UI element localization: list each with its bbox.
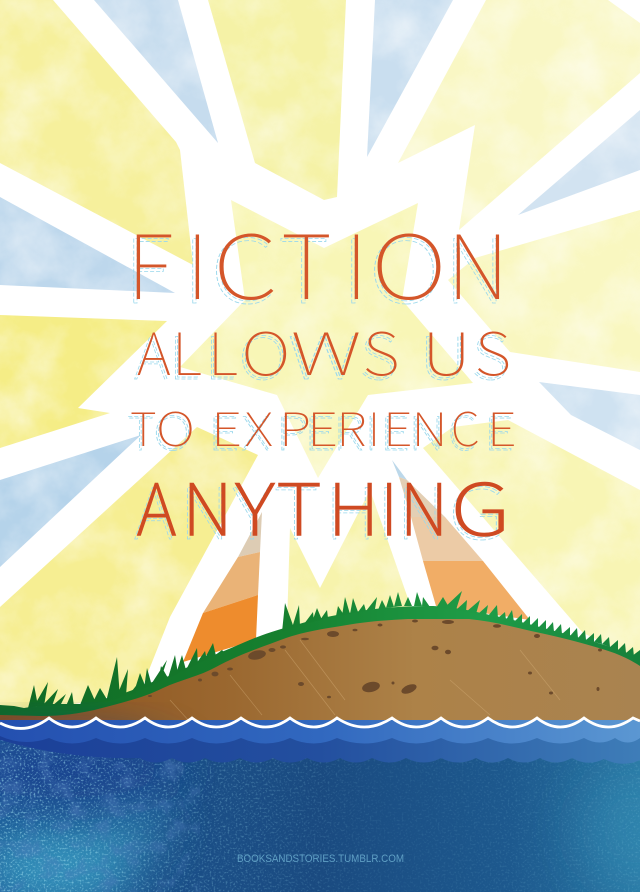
shadow line: to experience: T <box>127 397 154 464</box>
line: allows us: U <box>422 307 471 392</box>
line: anything: N <box>400 454 448 556</box>
deep water <box>0 725 640 892</box>
ray: central yellow star <box>180 200 473 478</box>
dirt mound <box>0 617 640 735</box>
ray: left blue upper <box>0 197 175 293</box>
line: fiction: I <box>186 196 209 325</box>
shadow line: allows us: L <box>205 311 235 396</box>
line: fiction: C <box>213 196 278 325</box>
shadow line: anything: T <box>274 458 318 560</box>
shadow line: anything: I <box>377 458 395 560</box>
shadow line: fiction: I <box>342 200 365 329</box>
line: to experience: O <box>156 393 195 460</box>
shadow line: to experience: R <box>333 397 363 464</box>
ray: left yellow upper <box>0 315 167 448</box>
shadow line: allows us: L <box>169 311 199 396</box>
dirt stones <box>148 620 602 698</box>
line: to experience: I <box>368 393 380 460</box>
shadow line: fiction: C <box>210 200 275 329</box>
shadow line: fiction: T <box>278 200 329 329</box>
shadow line: to experience: C <box>448 397 477 464</box>
shadow line: allows us: U <box>419 311 468 396</box>
shadow line: anything: G <box>448 458 507 560</box>
line: to experience: C <box>451 393 480 460</box>
shadow line: to experience: O <box>153 397 192 464</box>
line: allows us: S <box>363 307 400 392</box>
ray: top blue right <box>367 0 453 157</box>
shadow line: fiction: F <box>124 200 170 329</box>
island <box>0 591 640 735</box>
right orange ray <box>392 460 530 620</box>
shadow line: to experience: X <box>242 397 270 464</box>
headline <box>127 196 516 556</box>
line: to experience: E <box>487 393 516 460</box>
line: fiction: F <box>127 196 173 325</box>
line: allows us: S <box>475 307 511 392</box>
shadow line: fiction: I <box>183 200 206 329</box>
line: anything: A <box>137 454 176 556</box>
line: fiction: T <box>281 196 332 325</box>
shadow line: anything: N <box>180 458 230 560</box>
ray: left blue lower <box>0 435 141 567</box>
shadow line: anything: A <box>134 458 173 560</box>
deep water light blotches <box>0 770 640 892</box>
line: to experience: E <box>307 393 338 460</box>
deep water dark mottling <box>0 740 200 892</box>
ray: left yellow lower <box>0 427 258 720</box>
wave band: upper <box>0 720 640 744</box>
line: to experience: E <box>383 393 412 460</box>
credit url: BOOKSANDSTORIES.TUMBLR.COM <box>237 853 404 865</box>
ray: right pale yellow <box>448 210 640 372</box>
line: anything: G <box>451 454 510 556</box>
shadow line: fiction: O <box>368 200 444 329</box>
dirt scratches <box>170 640 560 722</box>
ray: top left yellow <box>0 0 193 265</box>
line: allows us: W <box>291 307 362 392</box>
ray: lower right pale yellow <box>423 420 640 660</box>
line: to experience: R <box>336 393 366 460</box>
deep water left shadow <box>0 738 180 798</box>
shadow line: to experience: I <box>365 397 377 464</box>
line: allows us: O <box>241 307 290 392</box>
line: to experience: T <box>130 393 157 460</box>
line: anything: N <box>182 454 232 556</box>
shadow line: allows us: S <box>472 311 508 396</box>
line: fiction: O <box>371 196 447 325</box>
line: anything: I <box>380 454 398 556</box>
ray: top blue left <box>94 0 218 143</box>
ray: top right pale yellow <box>398 0 640 230</box>
sea <box>0 718 640 892</box>
shadow line: to experience: E <box>208 397 239 464</box>
ray: top centre yellow <box>208 0 346 200</box>
line: allows us: A <box>137 307 171 392</box>
shadow line: to experience: E <box>380 397 410 464</box>
wave band: middle <box>0 725 640 764</box>
left orange ray <box>183 512 262 662</box>
shadow line: to experience: N <box>408 397 444 464</box>
line: anything: H <box>328 454 379 556</box>
line: fiction: I <box>345 196 368 325</box>
headline dashed shadow <box>124 200 514 560</box>
line: allows us: L <box>172 307 202 392</box>
line: anything: Y <box>236 454 274 556</box>
line: to experience: X <box>244 393 273 460</box>
shadow line: anything: N <box>397 458 445 560</box>
shadow line: allows us: A <box>134 311 168 396</box>
line: allows us: L <box>208 307 238 392</box>
shadow line: allows us: S <box>360 311 397 396</box>
shadow line: to experience: E <box>484 397 514 464</box>
line: anything: T <box>276 454 322 556</box>
line: to experience: P <box>279 393 311 460</box>
deep water grunge <box>0 725 640 892</box>
line: to experience: E <box>211 393 242 460</box>
ray: right blue lower <box>539 382 640 450</box>
shadow line: to experience: P <box>276 397 308 464</box>
ray: yellow under the M <box>287 490 412 625</box>
grass band <box>0 606 640 716</box>
grass blades <box>28 591 640 708</box>
ray: right blue upper <box>518 110 640 215</box>
shadow line: fiction: N <box>444 200 506 329</box>
white waterline <box>0 718 640 728</box>
shadow line: anything: Y <box>232 458 272 560</box>
shadow line: allows us: O <box>238 311 287 396</box>
shadow line: to experience: E <box>304 397 335 464</box>
line: to experience: N <box>412 393 448 460</box>
shadow line: allows us: W <box>288 311 359 396</box>
shadow line: anything: H <box>325 458 376 560</box>
line: fiction: N <box>447 196 509 325</box>
